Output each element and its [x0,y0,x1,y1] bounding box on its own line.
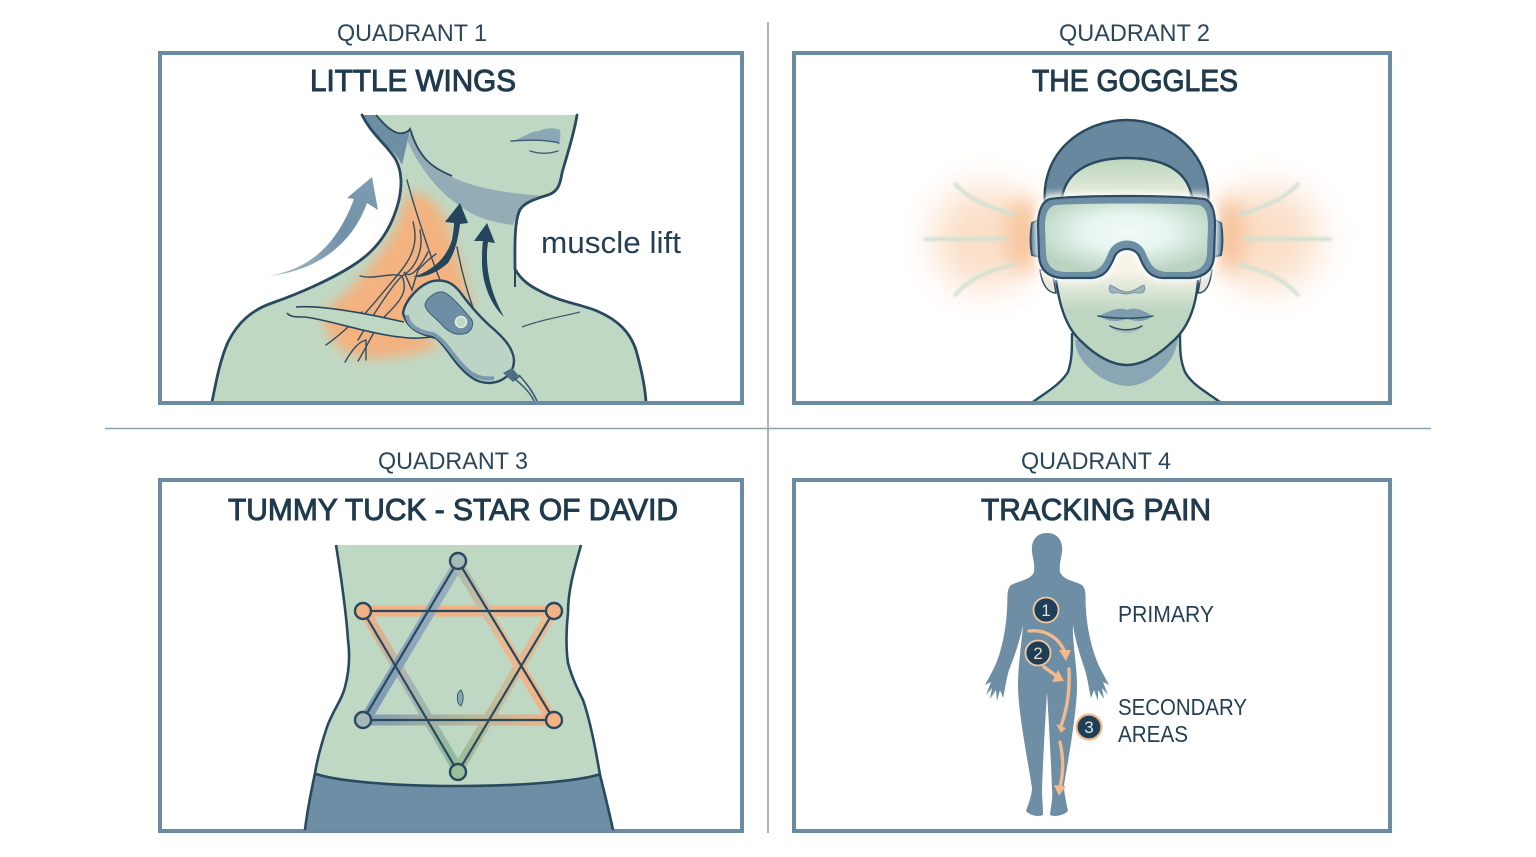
waistband shorts [305,774,613,830]
glow left [933,186,1038,290]
quadrant 4 frame [794,480,1390,831]
face [1050,200,1204,365]
torso outlines [305,545,613,830]
panel: quadrant 1 little wings [160,20,742,403]
panel: quadrant 3 tummy tuck [160,448,742,831]
quadrant 1 label: QUADRANT 1 [337,20,487,47]
quadrant 2 frame [794,53,1390,403]
marker 1: 1 [1041,601,1051,620]
collarbone [522,312,580,327]
goggle frame and lens [1038,196,1215,278]
wire [287,306,432,337]
orange muscle glow [322,190,474,358]
handheld device [403,280,537,401]
divider: horizontal [105,428,1431,430]
lift arrow right [474,223,504,317]
star bands colored [363,561,554,773]
marker 3: 3 [1084,718,1094,737]
quadrant 2 label: QUADRANT 2 [1059,20,1210,47]
marker 1 [1034,598,1058,622]
label: primary: PRIMARY [1118,601,1214,627]
lift arrow left [413,203,468,277]
quadrant 4 heading: TRACKING PAIN [981,492,1211,527]
hair behind neck [362,115,410,165]
quadrant 3 heading: TUMMY TUCK - STAR OF DAVID [228,492,678,527]
neck [1033,333,1220,402]
quadrant 1 heading: LITTLE WINGS [310,63,516,98]
ears [1040,270,1212,293]
divider: vertical [767,22,769,833]
neck and shoulders illustration [160,115,742,403]
quadrant 1 frame [160,53,742,403]
quadrant 4 label: QUADRANT 4 [1021,448,1171,475]
jaw shadow [407,130,547,225]
heat rays [925,184,1330,295]
glow right [1215,186,1320,290]
pain arrows [1029,631,1069,787]
mouth [1099,309,1153,321]
outline of neck and shoulders [212,115,646,402]
marker 3 [1076,714,1102,740]
neck muscle lines [326,180,474,362]
swim cap hair [1045,120,1208,205]
goggle halo [1038,196,1215,278]
nose [1109,285,1145,294]
star nodes [355,553,562,780]
goggle straps [1030,220,1222,257]
torso illustration [305,545,613,830]
big lift arrow [268,177,378,276]
quadrant 3 label: QUADRANT 3 [378,448,528,475]
arrow heads [1052,650,1071,796]
marker 2 [1026,640,1050,666]
marker 2: 2 [1033,644,1043,663]
panel: quadrant 2 the goggles [794,20,1390,403]
label: secondary areas: SECONDARY [1118,694,1247,720]
label: muscle lift: muscle lift [541,225,681,260]
body silhouette with pain path [985,533,1109,816]
quadrant 2 heading: THE GOGGLES [1032,63,1238,98]
panel: quadrant 4 tracking pain [794,448,1390,831]
label: secondary areas: AREAS [1118,721,1188,747]
navel [457,690,463,706]
star lines [363,561,554,772]
head with goggles [1030,120,1222,402]
quadrant 3 frame [160,480,742,831]
mouth [511,128,560,143]
